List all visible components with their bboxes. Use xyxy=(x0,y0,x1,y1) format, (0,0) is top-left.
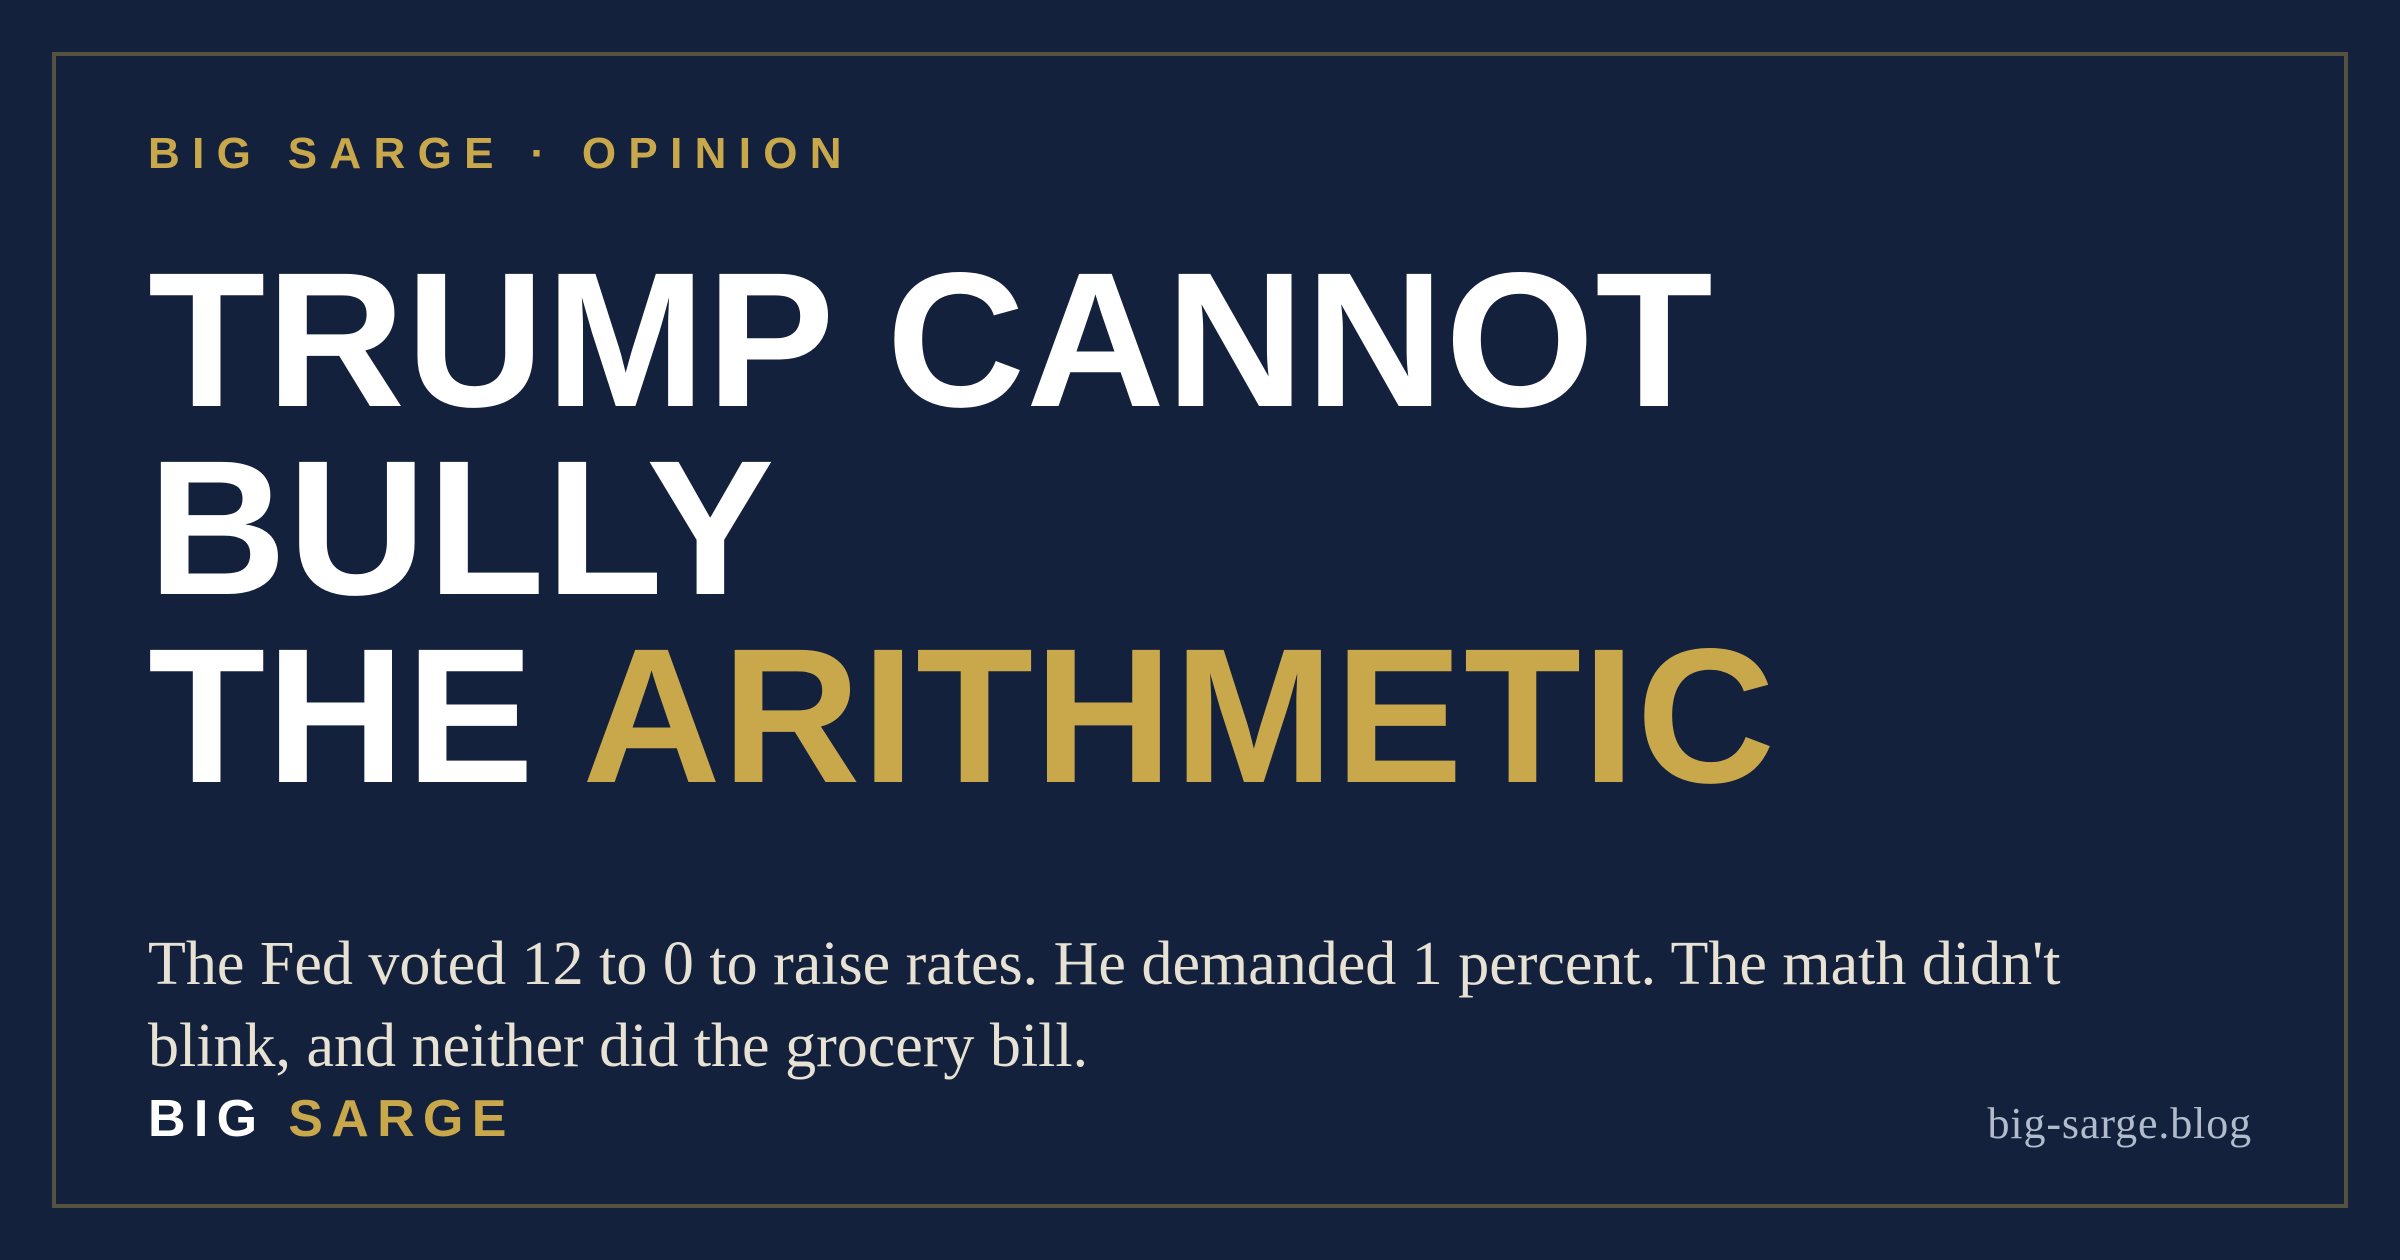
title xyxy=(148,232,1776,822)
subtitle: The Fed voted 12 to 0 to raise rates. He demanded 1 percent. The math didn't xyxy=(148,930,2061,998)
site url: big-sarge.blog xyxy=(1988,1098,2252,1148)
title: TRUMP CANNOT xyxy=(148,232,1714,446)
eyebrow: BIG SARGE · OPINION xyxy=(148,129,854,178)
title: THE ARITHMETIC xyxy=(148,608,1776,822)
title: BULLY xyxy=(148,420,775,634)
subtitle xyxy=(148,930,2061,1080)
subtitle: blink, and neither did the grocery bill. xyxy=(148,1012,1088,1080)
brand wordmark: BIG SARGE xyxy=(148,1090,515,1148)
